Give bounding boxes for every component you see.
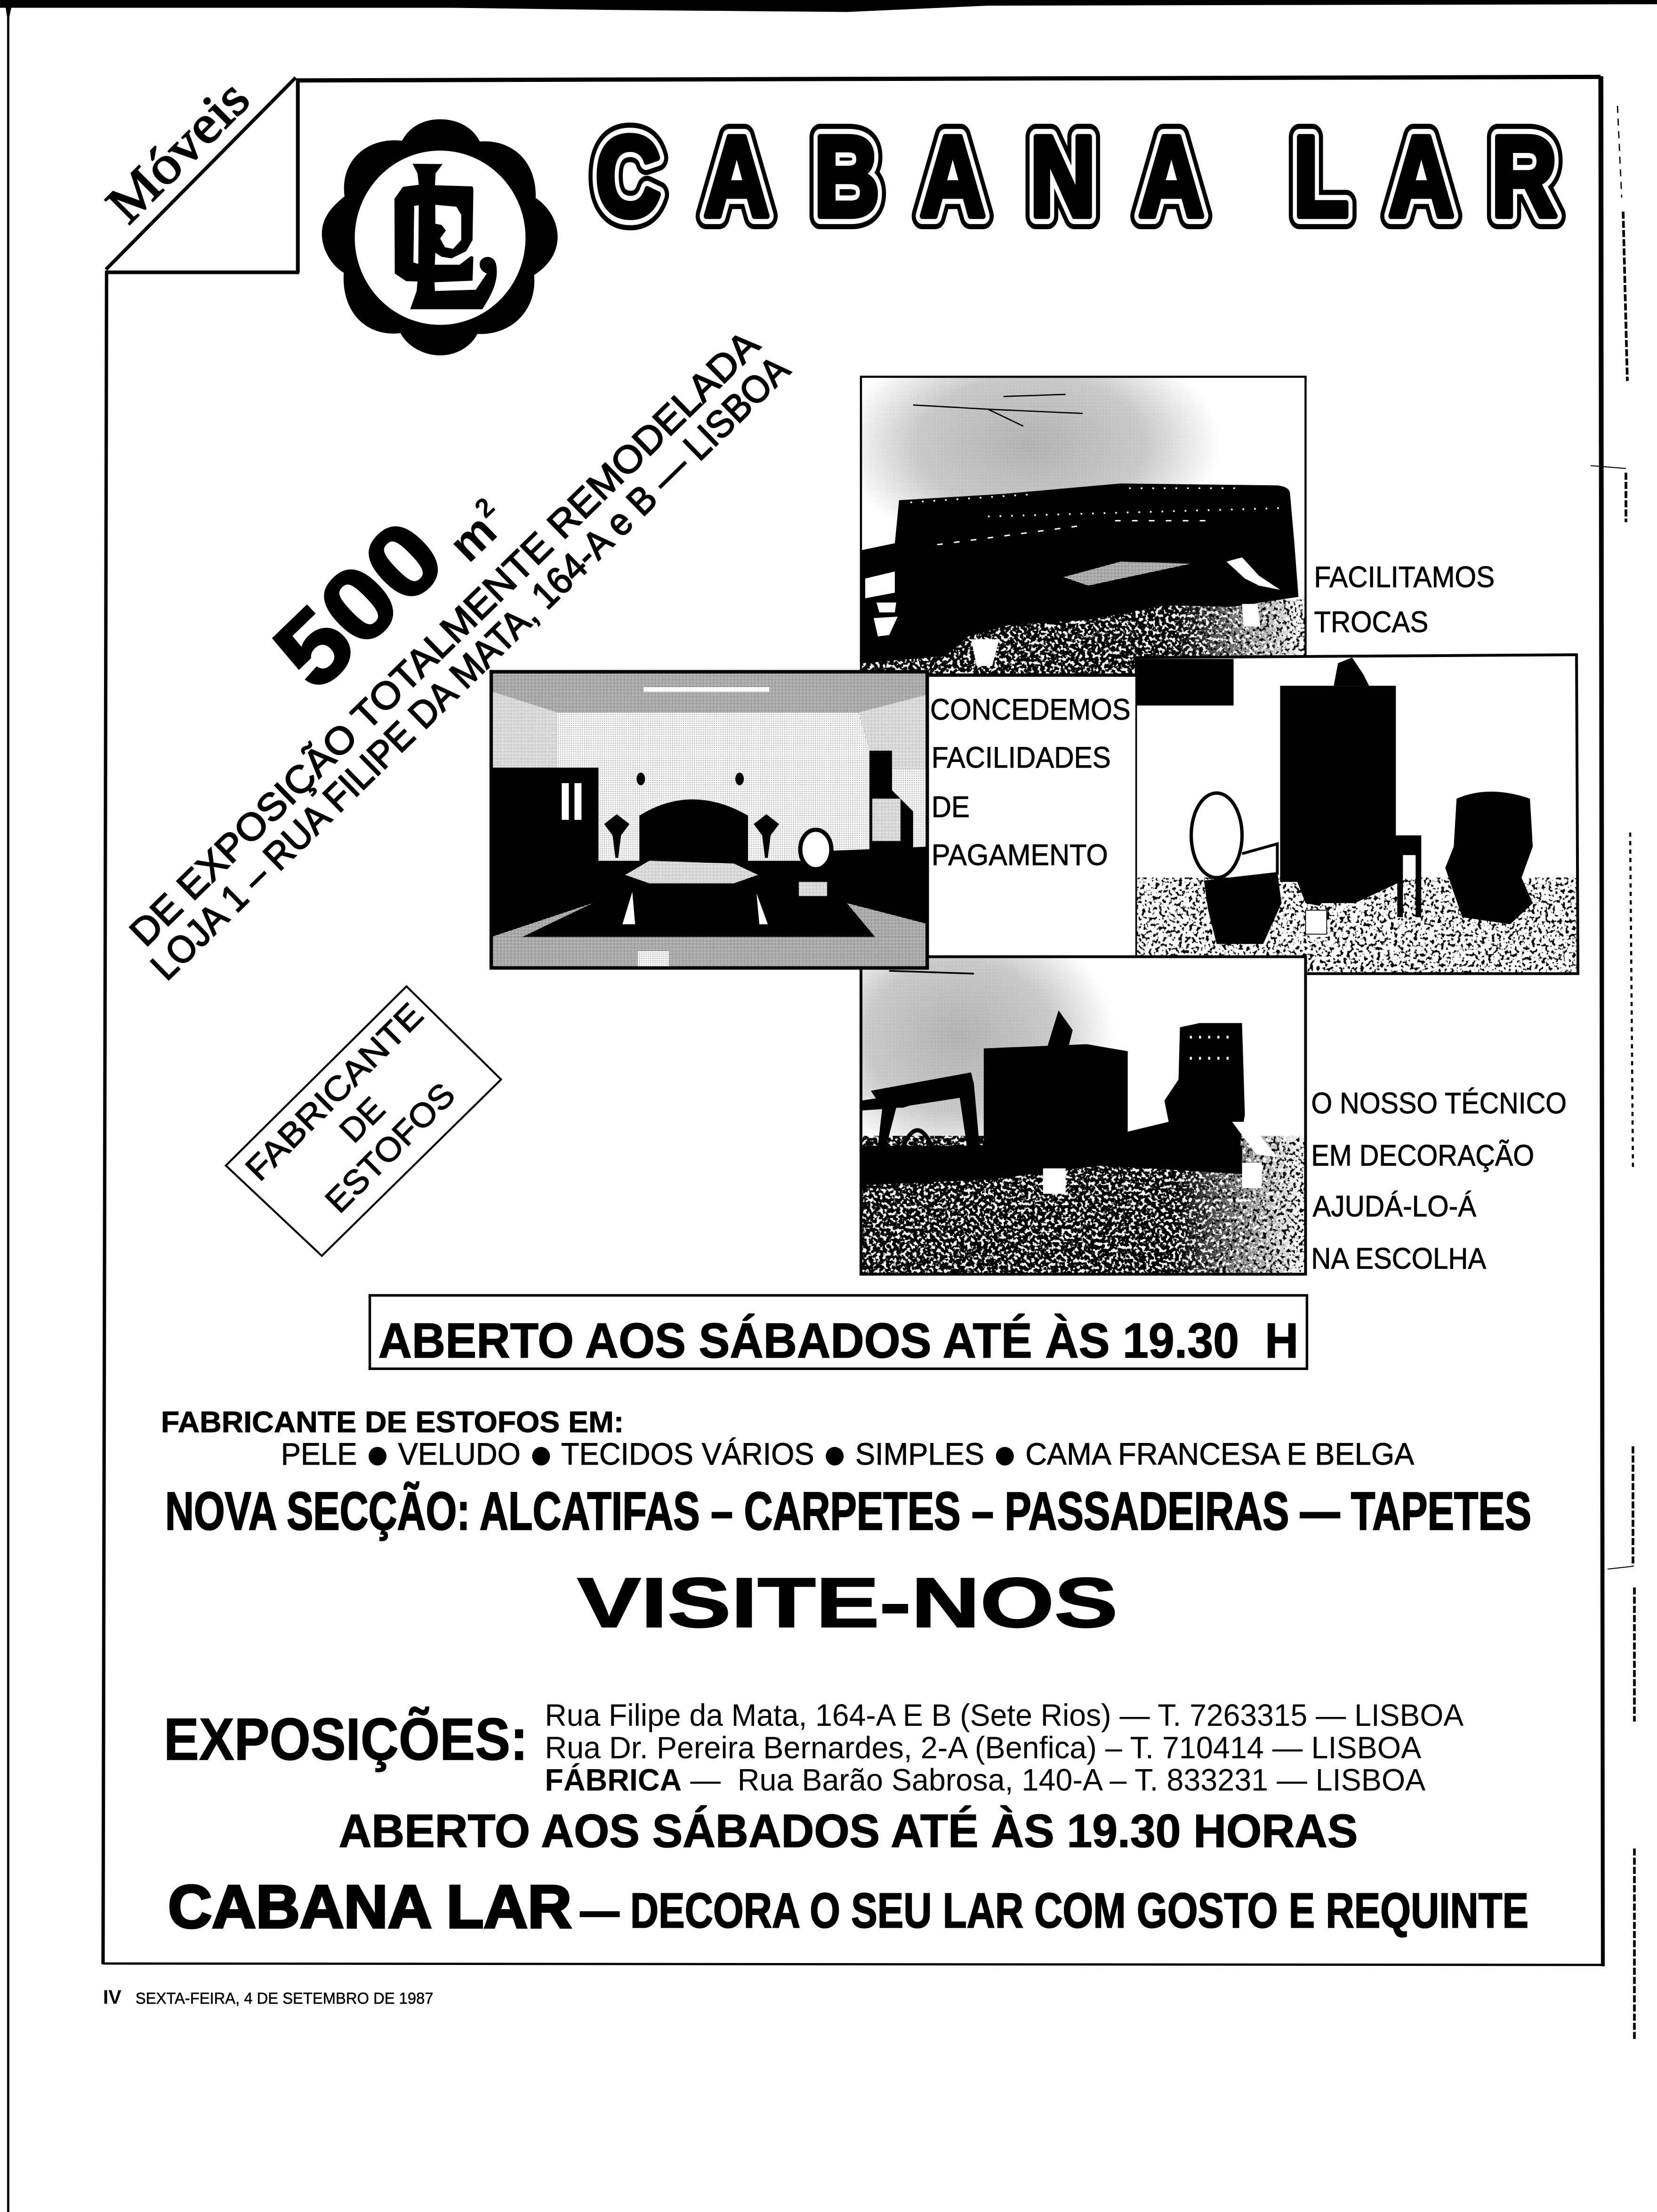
corner label: Móveis: Móveis — [95, 68, 260, 234]
title: CABANA LAR: CABANA LAR — [595, 112, 1557, 240]
photo: sofa and coffee table — [862, 377, 1305, 673]
text panel: payment terms — [929, 676, 1136, 958]
slogan: CABANA LAR — [168, 1873, 571, 1941]
addresses block: Rua Filipe da Mata, 164-A E B (Sete Rios) — T. 7263315 — LISBOA — [545, 1698, 1464, 1732]
photo border: armchairs — [1135, 655, 1578, 974]
diamond badge: fabricante de estofos — [226, 986, 501, 1256]
caption: o nosso tecnico: O NOSSO TÉCNICO — [1311, 1087, 1567, 1120]
footer: page and date: SEXTA-FEIRA, 4 DE SETEMBRO DE 1987 — [136, 1989, 434, 2007]
opening hours box: ABERTO AOS SÁBADOS ATÉ ÀS 19.30 H — [378, 1313, 1298, 1368]
upholstery range: FABRICANTE DE ESTOFOS EM: — [161, 1406, 624, 1439]
advert frame with folded corner — [103, 76, 1605, 1966]
title: CABANA LAR: CABANA LAR — [595, 112, 1557, 240]
photo: sideboard, cart and high-back chair — [862, 958, 1304, 1273]
photo: bedroom — [491, 672, 929, 968]
text panel: payment terms: DE — [932, 791, 970, 824]
photo border: sofa — [861, 377, 1305, 674]
caption: o nosso tecnico: AJUDÁ-LO-Á — [1312, 1190, 1476, 1223]
opening hours line: ABERTO AOS SÁBADOS ATÉ ÀS 19.30 HORAS — [339, 1805, 1358, 1857]
logo: flower emblem with monogram — [322, 119, 558, 355]
upholstery range: VELUDO — [390, 1436, 529, 1471]
slogan — [168, 1873, 1528, 1941]
call to action: visite-nos: VISITE-NOS — [577, 1563, 1118, 1642]
diamond badge: fabricante de estofos: ESTOFOS — [318, 1076, 462, 1220]
upholstery range — [161, 1406, 1414, 1478]
upholstery range: CAMA FRANCESA E BELGA — [1017, 1436, 1414, 1471]
upholstery range: ● — [822, 1431, 847, 1478]
photo border: bedroom — [491, 672, 927, 968]
addresses block: EXPOSIÇÕES: — [164, 1706, 528, 1772]
caption: o nosso tecnico: NA ESCOLHA — [1311, 1242, 1486, 1275]
footer: page and date: IV — [103, 1986, 121, 2008]
caption: o nosso tecnico: EM DECORAÇÃO — [1311, 1139, 1534, 1172]
upholstery range: PELE — [281, 1436, 360, 1471]
upholstery range: ● — [365, 1431, 390, 1478]
caption: facilitamos trocas: FACILITAMOS — [1314, 561, 1495, 593]
caption: facilitamos trocas — [1314, 561, 1495, 639]
text panel: payment terms: CONCEDEMOS — [930, 693, 1131, 726]
upholstery range: SIMPLES — [847, 1436, 993, 1471]
upholstery range: ● — [993, 1431, 1017, 1478]
photo: armchairs and tall cabinet — [1135, 656, 1578, 974]
headline: 500 m2: m — [439, 504, 507, 572]
diamond badge: fabricante de estofos: FABRICANTE — [238, 996, 431, 1188]
caption: facilitamos trocas: TROCAS — [1314, 606, 1428, 639]
addresses block: FÁBRICA — Rua Barão Sabrosa, 140-A – T. 833231 — LISBOA — [545, 1763, 1425, 1797]
title: CABANA LAR: CABANA LAR — [595, 112, 1557, 240]
photo border: sideboard — [861, 957, 1305, 1274]
headline: 500 m2: 500 — [252, 499, 465, 710]
diamond badge: fabricante de estofos: DE — [332, 1090, 392, 1150]
caption: o nosso tecnico — [1311, 1087, 1567, 1275]
upholstery range: ● — [529, 1431, 553, 1478]
addresses block: Rua Dr. Pereira Bernardes, 2-A (Benfica) – T. 710414 — LISBOA — [545, 1730, 1421, 1765]
upholstery range: TECIDOS VÁRIOS — [553, 1436, 822, 1471]
text panel: payment terms: PAGAMENTO — [932, 839, 1108, 872]
headline: 500 m2: 2 — [469, 492, 500, 524]
diagonal text: exhibition and address: LOJA 1 – RUA FILIPE DA MATA, 164-A e B — LISBOA — [143, 348, 798, 988]
addresses block — [164, 1698, 1464, 1797]
diagonal text: exhibition and address: DE EXPOSIÇÃO TOTALMENTE REMODELADA — [122, 323, 767, 954]
text panel: payment terms: FACILIDADES — [932, 741, 1111, 774]
